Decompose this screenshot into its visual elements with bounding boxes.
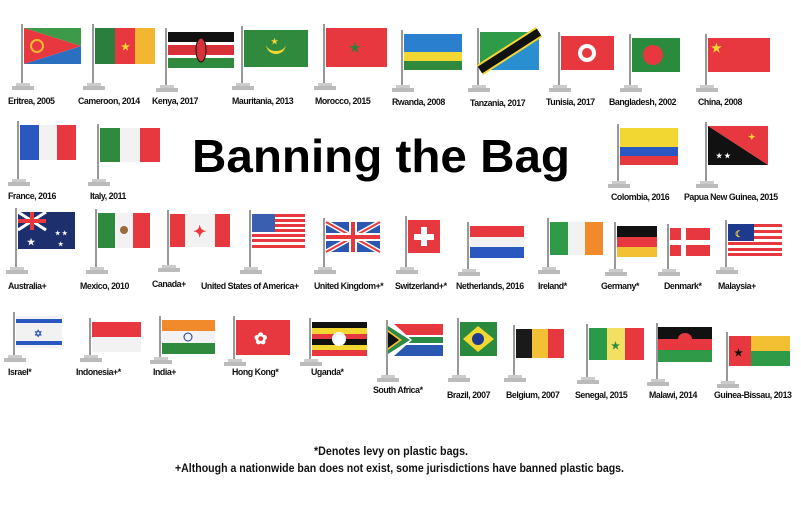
flag: Papua New Guinea: ★ ★	[716, 152, 731, 160]
flag: Switzerland	[395, 216, 448, 291]
flag: Germany	[601, 222, 657, 291]
flag: Guinea-Bissau: Guinea-Bissau, 2013	[714, 390, 792, 400]
flag: Senegal	[575, 324, 644, 400]
flag: Netherlands	[456, 222, 524, 291]
flag: Ireland: Ireland*	[538, 281, 568, 291]
flag: India	[150, 316, 215, 377]
flag: Guinea-Bissau	[714, 332, 792, 400]
flag: Israel: Israel*	[8, 367, 32, 377]
flag: South Africa	[373, 320, 443, 395]
flag: Belgium: Belgium, 2007	[506, 390, 560, 400]
flag: Uganda: Uganda*	[311, 367, 345, 377]
flag: Tanzania	[468, 28, 539, 108]
flag: Malawi: Malawi, 2014	[649, 390, 697, 400]
flag: China: ★	[711, 41, 722, 55]
flag: Cameroon: ★	[121, 42, 130, 53]
flag: Denmark: Denmark*	[664, 281, 702, 291]
flag: Eritrea	[8, 24, 81, 106]
flag: Uganda	[300, 318, 367, 377]
flag: United States of America	[201, 210, 305, 291]
flag: Australia: ★ ★	[55, 230, 68, 237]
flag: Cameroon	[78, 24, 155, 106]
flag: Malaysia: Malaysia+	[718, 281, 756, 291]
flag: Indonesia: Indonesia+*	[76, 367, 122, 377]
flag: Mauritania: Mauritania, 2013	[232, 96, 294, 106]
flag: Bangladesh	[609, 34, 680, 107]
flag: Italy: Italy, 2011	[90, 191, 127, 201]
flag: Senegal: Senegal, 2015	[575, 390, 628, 400]
flag: Colombia: Colombia, 2016	[611, 192, 670, 202]
flag: Kenya: Kenya, 2017	[152, 96, 198, 106]
flag: Malawi	[647, 323, 712, 400]
flag: Guinea-Bissau: ★	[734, 348, 743, 359]
flag: Hong Kong: ✿	[254, 331, 267, 348]
flag: Brazil	[447, 318, 497, 400]
flag: Malaysia: ☾	[735, 229, 743, 239]
flag: Mexico	[80, 209, 150, 291]
flag: Morocco: Morocco, 2015	[315, 96, 371, 106]
flag: Rwanda: Rwanda, 2008	[392, 97, 445, 107]
flag: Canada: ✦	[193, 224, 206, 241]
flag: Indonesia	[76, 318, 141, 377]
flag: Papua New Guinea: Papua New Guinea, 2015	[684, 192, 778, 202]
flag: France	[8, 121, 76, 201]
flag: Cameroon: Cameroon, 2014	[78, 96, 140, 106]
flag: Canada	[152, 210, 230, 289]
flag: Malaysia	[716, 220, 782, 291]
flag: Colombia	[608, 124, 678, 202]
flag: Senegal: ★	[611, 341, 620, 352]
flag: Tunisia: Tunisia, 2017	[546, 97, 595, 107]
flag: Australia: ★	[27, 237, 36, 247]
flag: Mauritania: ★	[271, 37, 279, 46]
flag: Rwanda	[392, 30, 462, 107]
flag: Mexico: Mexico, 2010	[80, 281, 129, 291]
flag: Tunisia	[546, 32, 614, 107]
flag: Australia: Australia+	[8, 281, 47, 291]
flag: Morocco	[314, 24, 387, 106]
flag: Eritrea: Eritrea, 2005	[8, 96, 55, 106]
flag: Morocco: ★	[349, 40, 361, 55]
title: Banning the Bag	[192, 130, 570, 182]
flag: India: India+	[153, 367, 176, 377]
flag: Belgium	[504, 325, 564, 400]
flag: Tanzania: Tanzania, 2017	[470, 98, 526, 108]
flag: Ireland	[538, 218, 603, 291]
flag: Papua New Guinea: ✦	[748, 132, 756, 142]
flag: Germany: Germany*	[601, 281, 640, 291]
flag: Brazil: Brazil, 2007	[447, 390, 491, 400]
flag: Hong Kong	[224, 316, 290, 377]
flag: Australia: ★	[58, 241, 64, 248]
flag: Netherlands: Netherlands, 2016	[456, 281, 524, 291]
flag: Bangladesh: Bangladesh, 2002	[609, 97, 677, 107]
footnote: *Denotes levy on plastic bags.	[314, 446, 468, 458]
flag: United Kingdom	[314, 218, 384, 291]
flag: Hong Kong: Hong Kong*	[232, 367, 279, 377]
flag: Israel: ✡	[34, 329, 42, 340]
flag: China: China, 2008	[698, 97, 743, 107]
footnote: +Although a nationwide ban does not exist, some jurisdictions have banned plastic bags.	[175, 463, 624, 475]
flag: United States of America: United States of America+	[201, 281, 299, 291]
flag: Mauritania	[232, 26, 308, 106]
flag: Kenya	[152, 28, 234, 106]
flag: South Africa: South Africa*	[373, 385, 424, 395]
flag: France: France, 2016	[8, 191, 56, 201]
flag: Denmark	[658, 224, 710, 291]
footnote	[175, 446, 624, 475]
flag: Papua New Guinea	[684, 122, 778, 202]
flag: Australia	[6, 208, 75, 291]
flag: China	[696, 34, 770, 107]
flag: Israel	[4, 312, 62, 377]
flag: Italy	[88, 124, 160, 201]
flag: Canada: Canada+	[152, 279, 186, 289]
flag: Switzerland: Switzerland+*	[395, 281, 448, 291]
flag: United Kingdom: United Kingdom+*	[314, 281, 384, 291]
